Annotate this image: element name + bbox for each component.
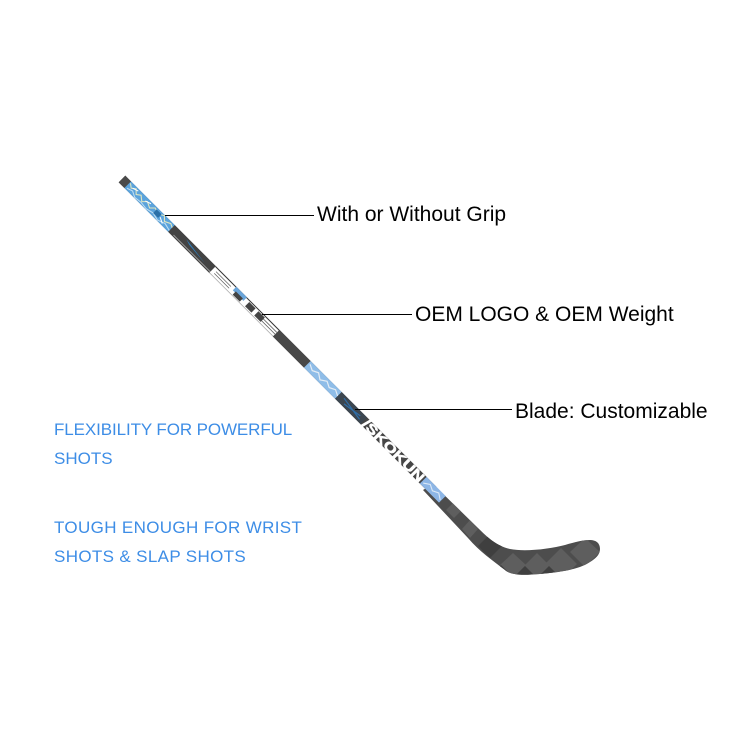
lower blue graphic [420, 477, 446, 503]
leader line: logo [262, 314, 412, 316]
dark mid section [273, 330, 311, 368]
upper grip graphic [124, 181, 175, 232]
SKOKUN logo section [358, 416, 428, 486]
dark section with blue flash [168, 225, 217, 274]
butt end cap [119, 176, 131, 188]
text: flexibility: SHOTS [54, 449, 113, 468]
label: blade: Blade: Customizable [515, 400, 708, 423]
shaft [117, 174, 448, 505]
blade [423, 484, 600, 580]
label: logo: OEM LOGO & OEM Weight [415, 303, 674, 326]
text: toughness: TOUGH ENOUGH FOR WRIST [54, 518, 302, 537]
dark blue-streak section [335, 392, 367, 424]
leader line: grip [165, 214, 314, 216]
text: toughness: SHOTS & SLAP SHOTS [54, 547, 246, 566]
leader line: blade [355, 408, 512, 410]
brand text: SKOKUN: /SKOKUN [359, 416, 428, 485]
white logo section with stripes [209, 266, 281, 338]
text: flexibility [54, 420, 292, 468]
text: toughness [54, 518, 302, 566]
label: grip: With or Without Grip [317, 203, 506, 226]
text: flexibility: FLEXIBILITY FOR POWERFUL [54, 420, 292, 439]
middle blue graphic [304, 361, 342, 399]
hockey stick illustration [118, 176, 600, 575]
